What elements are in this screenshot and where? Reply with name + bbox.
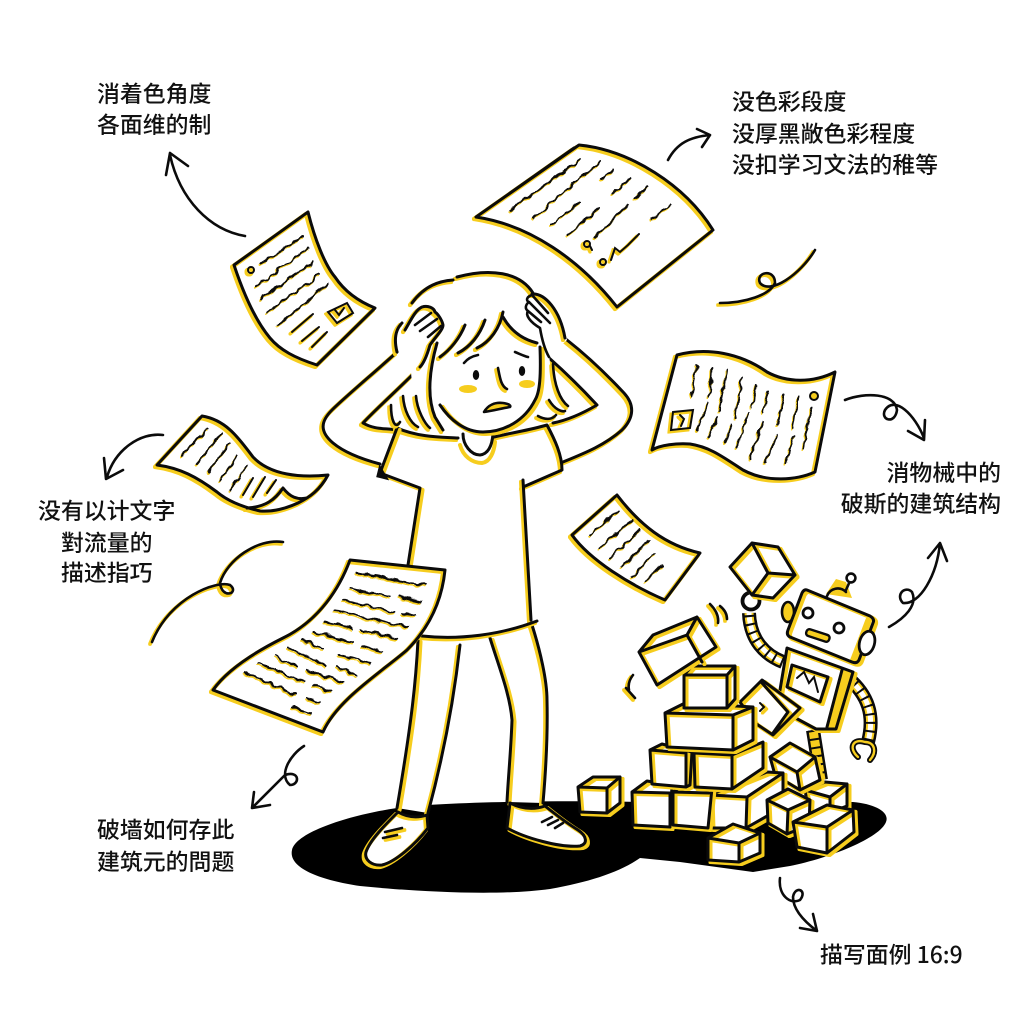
text lines	[692, 365, 811, 463]
robot body	[777, 648, 853, 730]
cheeks	[459, 385, 477, 393]
label: top right: 没厚黑敞色彩程度	[732, 115, 915, 149]
label: top right: 没扣学习文法的稚等	[732, 146, 938, 180]
squiggle left	[152, 542, 283, 642]
text lines	[590, 510, 662, 582]
legs	[397, 622, 547, 813]
arrow: bottom left	[252, 746, 304, 808]
arrow: top left	[166, 153, 245, 236]
cube	[650, 744, 692, 787]
arrow: right curl	[845, 395, 925, 440]
stressed person	[323, 272, 632, 865]
circle marker	[810, 392, 818, 400]
arms	[323, 340, 632, 465]
nose	[498, 368, 507, 389]
text lines	[245, 573, 425, 713]
cube	[665, 703, 753, 750]
paper: right wavy	[652, 352, 835, 479]
motion marks	[626, 604, 727, 698]
cube	[793, 805, 854, 853]
mouth	[484, 403, 510, 412]
t-shirt	[378, 425, 562, 637]
cube	[673, 784, 712, 828]
robot lowered arm	[848, 678, 874, 760]
paper: left curled	[157, 416, 328, 511]
pile of cubes	[578, 604, 854, 862]
text lines	[510, 160, 670, 237]
shoes	[366, 803, 585, 865]
eyes	[473, 370, 479, 380]
stamp	[671, 410, 693, 430]
small loose cube	[578, 777, 620, 813]
arrow: top right	[668, 129, 710, 160]
label: top left: 消着色角度	[97, 75, 212, 109]
label: top right	[732, 83, 938, 180]
eyebrows	[464, 352, 528, 363]
paper: large bottom left	[213, 560, 445, 732]
label: left: 對流量的	[61, 524, 153, 558]
paper: top center	[476, 145, 713, 307]
hair strands	[391, 364, 568, 428]
text lines	[255, 237, 328, 325]
robot head	[782, 574, 877, 663]
cube	[805, 782, 847, 820]
flying cube	[639, 617, 716, 685]
paper: center small	[572, 495, 700, 600]
arrow: robot label	[889, 543, 947, 627]
top cube	[684, 666, 735, 708]
label: right: 破斯的建筑结构	[841, 485, 1001, 519]
ground shadow	[292, 801, 887, 893]
label: top left: 各面维的制	[97, 106, 211, 140]
cube	[694, 742, 763, 789]
cube	[632, 781, 672, 827]
robot	[730, 543, 877, 780]
label: left: 描述指巧	[61, 554, 153, 588]
text lines	[182, 428, 248, 490]
label: right: 消物械中的	[887, 454, 1001, 488]
robot raised arm	[742, 592, 783, 662]
stamp	[328, 303, 353, 323]
label: left	[38, 492, 175, 588]
arrow: left label	[104, 435, 163, 479]
cube	[708, 824, 760, 862]
cube held by robot	[730, 543, 795, 598]
hands	[395, 294, 567, 367]
paper: top left	[234, 212, 375, 365]
label: bottom left	[97, 811, 234, 877]
arrow: bottom right	[780, 878, 817, 931]
cube	[770, 743, 820, 790]
cube	[767, 789, 810, 834]
label: top right: 没色彩段度	[732, 83, 847, 117]
squiggle top right	[720, 250, 815, 303]
label: bottom left: 建筑元的問题	[97, 843, 234, 877]
tilted cube	[740, 680, 800, 735]
robot leg	[813, 730, 821, 780]
label: bottom left: 破墙如何存此	[97, 811, 234, 845]
head and hair	[391, 272, 568, 432]
label: left: 没有以计文字	[38, 492, 175, 526]
cube	[710, 772, 783, 828]
label: bottom right: 描写面例 16:9	[820, 936, 963, 970]
label: right	[841, 454, 1001, 519]
bangs	[440, 312, 537, 357]
label: top left	[97, 75, 212, 140]
